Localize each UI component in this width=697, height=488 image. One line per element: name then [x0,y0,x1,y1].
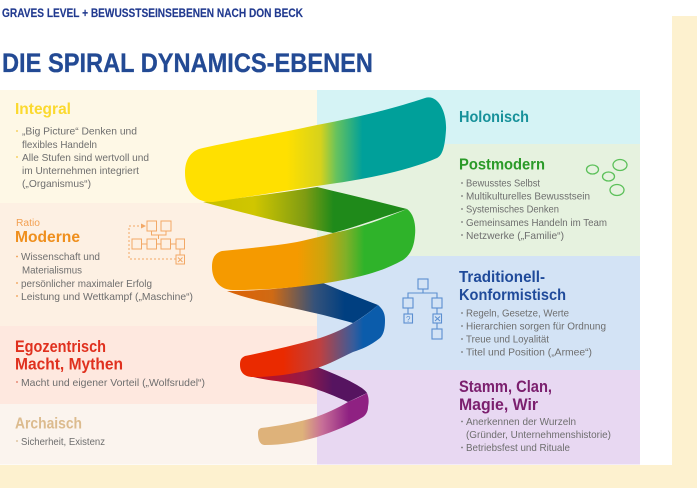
text block: Moderne bullets: Wissenschaft und [21,251,100,263]
heading: Holonisch: Holonisch [459,109,529,126]
text block: Integral bullets: „Big Picture“ Denken und [22,126,137,138]
text block: Integral bullets: flexibles Handeln [22,139,97,151]
text block: Archaisch bullet: Sicherheit, Existenz [21,436,105,448]
text block: Postmodern bullets: Bewusstes Selbst [466,178,540,190]
text block: Postmodern bullets: Multikulturelles Bewusstsein [466,190,590,202]
heading: Traditionell-Konformistisch [459,269,566,304]
panel: Holonisch [317,90,640,144]
text block: Moderne bullets: Materialismus [22,264,82,276]
text block: Moderne bullets [16,251,193,303]
label: Ratio: Ratio [16,218,40,229]
text block: Integral bullets: im Unternehmen integriert [22,165,139,177]
text block: Integral bullets: („Organismus“) [22,178,91,190]
text block: Traditionell bullets: Titel und Position („Armee“) [466,346,592,358]
icon: hierarchy [403,279,442,339]
text block: Integral bullets [16,126,149,190]
text block: Postmodern bullets: Netzwerke („Familie“) [466,230,564,242]
panel: Integral [0,90,317,203]
heading: Moderne: Moderne [15,229,80,246]
heading: Postmodern: Postmodern [459,156,545,174]
heading: Traditionell-Konformistisch: Konformistisch [459,287,566,304]
icon: hierarchy: ? [406,315,411,324]
icon: process flow [129,221,184,264]
panel: Moderne [0,203,317,326]
heading: Integral: Integral [15,101,71,118]
heading: Egozentrisch Macht, Mythen [15,337,123,374]
text block: Postmodern bullets [461,178,607,242]
text block: Postmodern bullets: Gemeinsames Handeln im Team [466,217,607,229]
heading: Egozentrisch Macht, Mythen: Macht, Mythen [15,354,123,374]
text block: Stamm bullets [461,416,611,454]
panel: Postmodern [317,144,640,256]
heading: Stamm, Clan, Magie, Wir: Magie, Wir [459,395,538,414]
text block: Stamm bullets: Anerkennen der Wurzeln [466,416,576,428]
text block: Traditionell bullets [461,308,606,358]
text block: Stamm bullets: Betriebsfest und Rituale [466,442,570,454]
heading: Archaisch: Archaisch [15,416,82,432]
text block: Postmodern bullets: Systemisches Denken [466,204,559,216]
text block: Traditionell bullets: Treue und Loyalität [466,334,549,346]
heading: Stamm, Clan, Magie, Wir: Stamm, Clan, [459,377,552,396]
text block: Traditionell bullets: Hierarchien sorgen für Ordnung [466,320,606,332]
heading: Traditionell-Konformistisch: Traditionell- [459,269,545,286]
heading: Stamm, Clan, Magie, Wir [459,377,552,414]
text block: Traditionell bullets: Regeln, Gesetze, Werte [466,308,569,320]
chart: spiral [185,97,446,445]
text block: Integral bullets: Alle Stufen sind wertvoll und [22,152,149,164]
text block: Moderne bullets: Leistung und Wettkampf („Maschine“) [21,291,193,303]
panel: Traditionell-Konformistisch [317,256,640,370]
panel: Stamm, Clan, Magie, Wir [317,370,640,464]
title: DIE SPIRAL DYNAMICS-EBENEN [2,48,373,78]
text block: Egozentrisch bullet: Macht und eigener Vorteil („Wolfsrudel“) [21,377,205,389]
panel: Egozentrisch [0,326,317,404]
subtitle: GRAVES LEVEL + BEWUSSTSEINSEBENEN NACH DON BECK [2,8,304,20]
icon: network circles [586,160,627,196]
heading: Egozentrisch Macht, Mythen: Egozentrisch [15,337,106,356]
text block: Stamm bullets: (Gründer, Unternehmenshistorie) [466,429,611,441]
panel: Archaisch [0,404,317,464]
text block: Moderne bullets: persönlicher maximaler Erfolg [21,278,152,290]
